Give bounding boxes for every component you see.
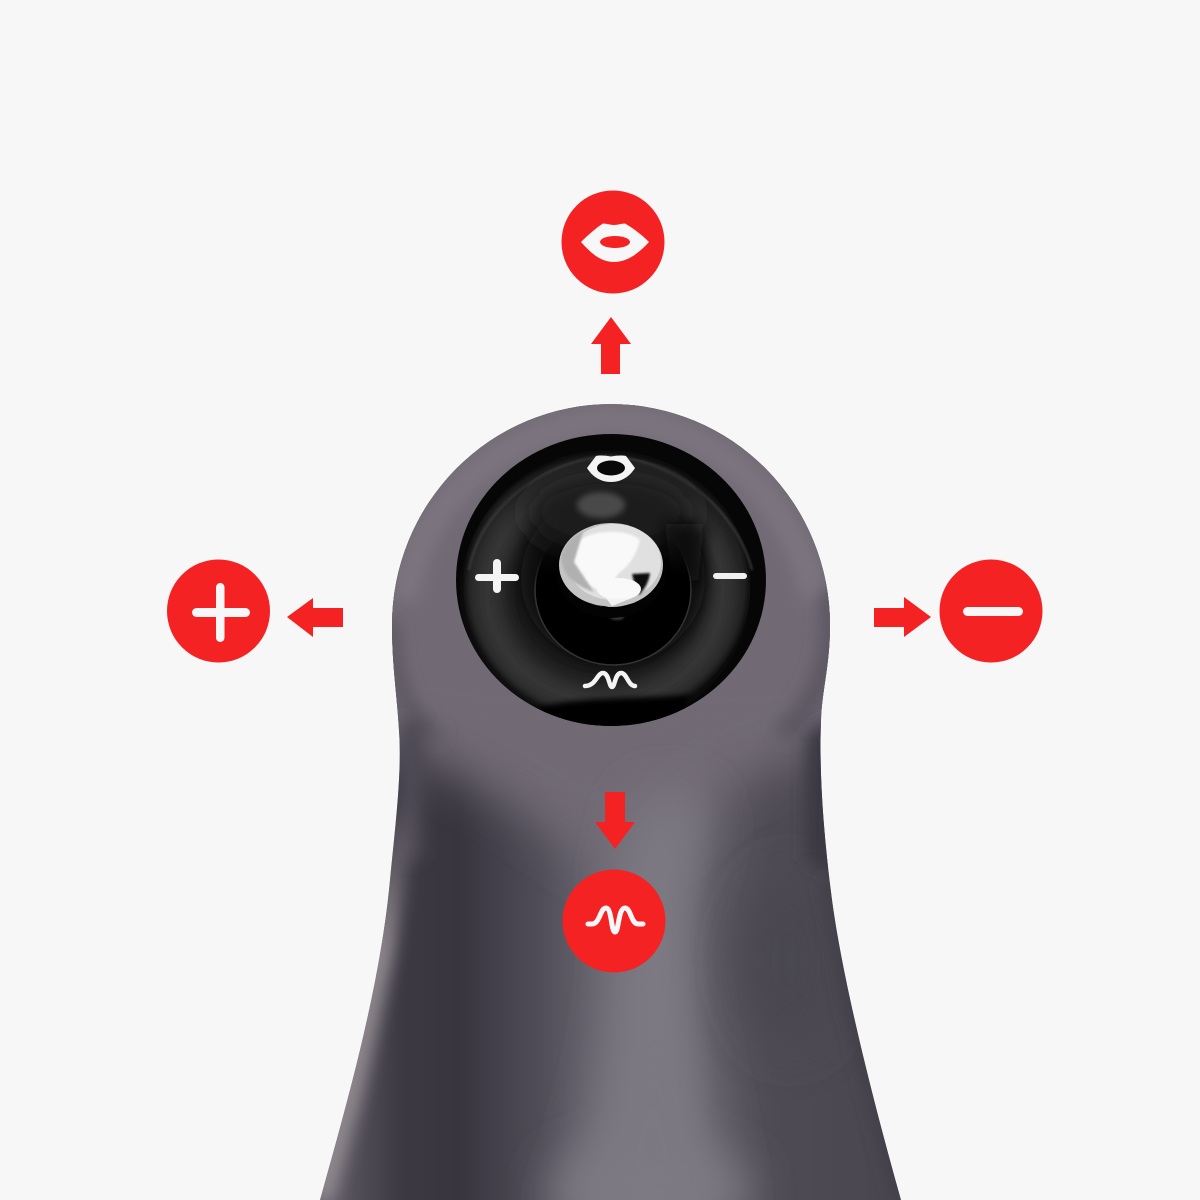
icon: minus badge: [940, 560, 1042, 662]
icon: plus on ring: [475, 559, 519, 593]
button dish: [536, 553, 690, 664]
chrome button: [556, 523, 666, 618]
icon: minus on ring: [713, 573, 747, 579]
icon: wave on ring: [585, 673, 635, 687]
neck edge shade: [396, 720, 424, 860]
head rim tone: [405, 420, 816, 600]
right edge shade: [828, 880, 901, 1200]
ring sheen: [487, 482, 723, 702]
icon: wave badge: [562, 870, 666, 972]
callout: increase (left): [167, 560, 343, 662]
callout: suction mode (up): [562, 190, 664, 374]
callout: decrease (right): [874, 560, 1042, 662]
top reflection: [577, 492, 625, 518]
icon: lips badge: [562, 190, 664, 294]
callout: vibration mode (down): [562, 792, 666, 972]
ring face: [466, 453, 748, 717]
icon: plus badge: [167, 560, 270, 662]
arrow: up: [591, 317, 631, 374]
arrow: left: [287, 598, 343, 637]
left edge highlight: [320, 800, 399, 1200]
arrow: down: [595, 792, 635, 849]
neck and head light area: [392, 404, 830, 852]
device body: [300, 380, 920, 1200]
inner well: [517, 530, 712, 668]
centre light streak: [577, 808, 732, 1168]
bottom reflection: [536, 693, 688, 726]
right shoulder shade: [758, 882, 849, 993]
diagram: device control functions: [167, 190, 1042, 1200]
icon: lips on ring: [587, 455, 635, 482]
arrow: right: [874, 597, 931, 637]
control ring: [456, 434, 766, 735]
